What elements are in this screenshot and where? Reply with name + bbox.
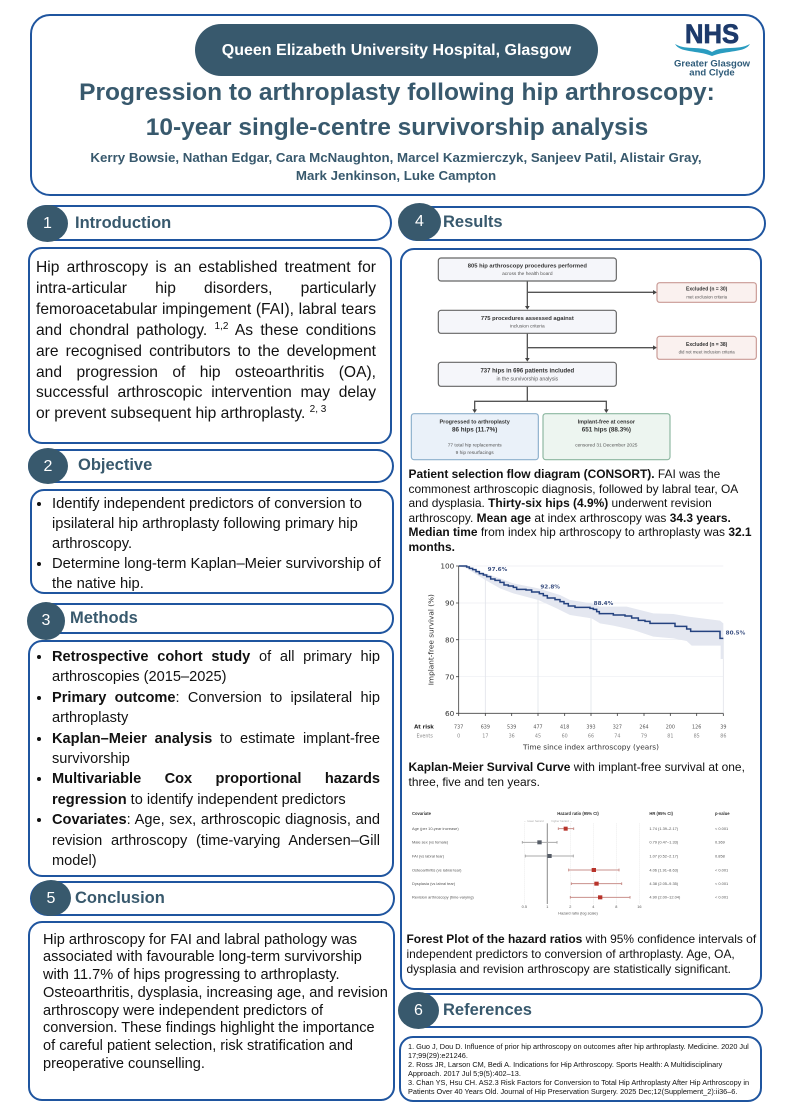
at risk table: 264 (639, 725, 649, 731)
row: male sex (412, 840, 725, 845)
at risk table: 74 (614, 734, 620, 740)
forest x axis (522, 905, 641, 916)
y axis labels: 80 (445, 635, 455, 644)
box: 805 procedures (438, 258, 616, 281)
panel: objective: Determine long-term Kaplan–Meier survivorship of the native hip. (52, 556, 381, 592)
column headers: Covariate (412, 811, 432, 816)
row: dysplasia: Dysplasia (vs labral tear) (412, 881, 456, 886)
forest x axis: Hazard ratio (log scale) (558, 912, 599, 916)
icon: NHS Greater Glasgow and Clyde logo (674, 19, 751, 78)
box: 775 procedures: inclusion criteria (510, 323, 545, 329)
section heading: Methods (27, 602, 394, 640)
at risk table: 60 (562, 734, 568, 740)
section heading: Results: 4 (415, 213, 424, 230)
box: excluded 38: Excluded (n = 38) (686, 342, 728, 348)
column headers: HR (95% CI) (649, 811, 674, 816)
box: progressed to arthroplasty: 9 hip resurfacings (456, 450, 494, 456)
section heading: Methods: 3 (42, 612, 50, 629)
Kaplan-Meier survival chart (414, 562, 746, 751)
at risk table: 393 (586, 725, 596, 731)
row: revision arthroscopy: Revision arthroscopy (time-varying) (412, 895, 474, 900)
forest x axis: 1 (546, 905, 548, 909)
section heading: Methods: Methods (70, 609, 138, 627)
forest plot: ← lower hazard (524, 819, 544, 823)
panel: introduction text: Hip arthroscopy is an established treatment for intra-articular hip disorders, particularly femoroacetabular impingement (FAI), labral tears and chondral pathology. 1,2 As these conditions are recognised contributors to the development and progression of hip osteoarthritis (OA), successful arthroscopic intervention may delay or prevent subsequent hip arthroplasty. 2, 3 (36, 259, 376, 422)
section heading: Results (398, 203, 766, 241)
panel: references: 1. Guo J, Dou D. Influence of prior hip arthroscopy on outcomes after hip arthroplasty. Medicine. 2020 Jul 17;99(29):e21246. (408, 1042, 749, 1060)
caption: patient selection flow diagram: Patient selection flow diagram (CONSORT). FAI was the commonest arthroscopic diagnosis, followed by labral tear, OA and dysplasia. Thirty-six hips (4.9%) underwent revision arthroscopy. Mean age at index arthroscopy was 34.3 years. Median time from index hip arthroscopy to arthroplasty was 32.1 months. (408, 467, 752, 554)
section heading: Results: Results (443, 213, 503, 231)
survival annotations (488, 567, 746, 636)
panel: methods: Retrospective cohort study of all primary hip arthroscopies (2015–2025) (52, 649, 380, 685)
row: FAI: FAI (vs labral tear) (412, 853, 445, 858)
box: excluded 30: Excluded (n = 30) (686, 287, 728, 293)
section heading: References: References (443, 1001, 532, 1019)
title: 10-year single-centre survivorship analysis (146, 114, 648, 141)
title: Progression to arthroplasty following hip arthroscopy: (79, 79, 715, 106)
section heading: Introduction: 1 (43, 215, 52, 232)
row: dysplasia: 4.38 (2.05–9.35) (649, 881, 679, 886)
at risk table: 539 (507, 725, 516, 731)
at risk table: 66 (588, 734, 594, 740)
forest x axis: 8 (615, 905, 617, 909)
panel: references (399, 1036, 762, 1102)
survival annotations: 88.4% (594, 601, 614, 607)
section heading: Objective: 2 (44, 458, 52, 475)
panel: methods: Primary outcome: Conversion to ipsilateral hip arthroplasty (52, 690, 380, 726)
row: age (412, 826, 728, 831)
survival annotations: 80.5% (726, 630, 746, 636)
at risk table: At risk (414, 725, 434, 731)
section heading: Objective (28, 448, 394, 484)
at risk table: 81 (667, 734, 673, 740)
y axis labels: 70 (445, 672, 455, 681)
at risk table: 39 (720, 725, 726, 731)
box: 737 hips (438, 362, 616, 386)
at risk table: 79 (641, 734, 647, 740)
panel: references: 2. Ross JR, Larson CM, Bedi A. Indications for Hip Arthroscopy. Sports Health: A Multidisciplinary Approach. 2017 Jul 5;9(5):402–13. (408, 1060, 722, 1078)
section heading: Conclusion: 5 (47, 890, 55, 907)
box: implant-free at censor: censored 31 December 2025 (575, 442, 638, 448)
y axis labels: 100 (440, 562, 455, 571)
at risk table: 200 (666, 725, 675, 731)
section heading: Introduction: Introduction (75, 214, 171, 232)
row: FAI: 0.858 (715, 853, 726, 858)
at risk table: 36 (509, 734, 515, 740)
caption: Kaplan-Meier survival curve: Kaplan-Meier Survival Curve with implant-free survival at one, three, five and ten years. (408, 760, 745, 789)
row: male sex: Male sex (vs female) (412, 840, 449, 845)
axes (456, 566, 723, 716)
at risk table: 477 (533, 725, 543, 731)
row: osteoarthritis: < 0.001 (715, 867, 728, 872)
row: dysplasia (412, 881, 728, 886)
forest x axis: 16 (637, 905, 641, 909)
box: progressed to arthroplasty (411, 414, 538, 460)
at risk table (414, 725, 726, 740)
box: 737 hips: in the survivorship analysis (497, 376, 559, 382)
at risk table: 0 (457, 734, 460, 740)
forest x axis: 0.5 (522, 905, 527, 909)
section heading: Introduction (27, 205, 392, 242)
icon: NHS Greater Glasgow and Clyde logo: Greater Glasgow (674, 58, 751, 70)
panel: methods: Kaplan–Meier analysis to estimate implant-free survivorship (52, 731, 380, 767)
row: revision arthroscopy: < 0.001 (715, 895, 728, 900)
panel: results (400, 248, 762, 990)
row: osteoarthritis: Osteoarthritis (vs labral tear) (412, 867, 462, 872)
survival curve (459, 566, 723, 638)
box: progressed to arthroplasty: 77 total hip replacements (448, 442, 502, 448)
box: implant-free at censor: 651 hips (88.3%) (582, 427, 631, 434)
panel: objective (30, 489, 394, 594)
survival annotations: 92.8% (540, 585, 560, 591)
icon: NHS Greater Glasgow and Clyde logo: and Clyde (689, 68, 735, 78)
box: progressed to arthroplasty: Progressed to arthroplasty (440, 420, 511, 426)
row: male sex: 0.369 (715, 840, 725, 845)
at risk table: 86 (720, 734, 726, 740)
at risk table: 85 (694, 734, 700, 740)
row: male sex: 0.79 (0.47–1.33) (649, 840, 679, 845)
panel: objective: Identify independent predictors of conversion to ipsilateral hip arthroplasty following primary hip arthroscopy. (52, 496, 362, 552)
at risk table: 17 (482, 734, 488, 740)
y axis title: Implant-free survival (%) (426, 594, 435, 685)
row: FAI: 1.07 (0.52–2.17) (649, 853, 679, 858)
row: revision arthroscopy (412, 895, 728, 900)
hospital banner (195, 24, 598, 76)
row: revision arthroscopy: 4.90 (2.00–12.04) (649, 895, 681, 900)
panel: conclusion: Hip arthroscopy for FAI and labral pathology was associated with favourable long-term survivorship with 11.7% of hips progressing to arthroplasty. Osteoarthritis, dysplasia, increasing age, and revision arthroscopy were independent predictors of conversion. These findings highlight the importance of careful patient selection, risk stratification and preoperative counselling. (43, 932, 388, 1072)
panel: methods: Covariates: Age, sex, arthroscopic diagnosis, and revision arthroscopy (time-varying Andersen–Gill model) (52, 812, 380, 869)
hospital banner: Queen Elizabeth University Hospital, Glasgow (222, 42, 571, 59)
forest plot: higher hazard → (552, 819, 573, 823)
title (79, 79, 715, 141)
row: osteoarthritis: 4.06 (1.91–8.63) (649, 867, 679, 872)
at risk table: 45 (535, 734, 541, 740)
panel: references: 3. Chan YS, Hsu CH. AS2.3 Risk Factors for Conversion to Total Hip Arthroplasty After Hip Arthroscopy in Patients Over 40 Years Old. Journal of Hip Preservation Surgery. 2025 Dec;12(Supplement_2):ii36–6. (408, 1078, 749, 1096)
header panel (30, 14, 765, 196)
row: age: < 0.001 (715, 826, 728, 831)
y axis labels: 90 (445, 599, 455, 608)
survival annotations: 97.6% (488, 567, 508, 573)
at risk table: 639 (481, 725, 490, 731)
box: 775 procedures (438, 310, 616, 333)
panel: methods: Multivariable Cox proportional hazards regression to identify independent predictors (52, 771, 380, 808)
y axis labels (440, 562, 455, 718)
row: age: 1.74 (1.39–2.17) (649, 826, 679, 831)
caption: forest plot: Forest Plot of the hazard ratios with 95% confidence intervals of independent predictors to conversion of arthroplasty. Age, OA, dysplasia and revision arthroscopy are statistically significant. (406, 932, 756, 976)
box: excluded 30: met exclusion criteria (686, 294, 728, 299)
column headers: Hazard ratio (95% CI) (557, 811, 599, 816)
box: 737 hips: 737 hips in 696 patients included (480, 369, 575, 375)
box: 805 procedures: across the health board (502, 271, 553, 277)
section heading: Conclusion (30, 880, 395, 916)
forest x axis: 2 (569, 905, 571, 909)
icon: NHS Greater Glasgow and Clyde logo: NHS (685, 19, 739, 49)
row: age: Age (per 10-year increase) (412, 826, 459, 831)
forest plot (412, 811, 730, 916)
row: FAI (412, 853, 726, 858)
forest x axis: 4 (592, 905, 595, 909)
box: 805 procedures: 805 hip arthroscopy procedures performed (468, 264, 587, 270)
at risk table: 737 (454, 725, 463, 731)
box: implant-free at censor (543, 414, 670, 460)
row: osteoarthritis (412, 867, 728, 872)
column headers: p-value (715, 811, 730, 816)
box: excluded 30 (657, 283, 756, 302)
at risk table: 418 (560, 725, 569, 731)
authors: Mark Jenkinson, Luke Campton (296, 168, 496, 183)
authors (90, 150, 702, 183)
box: excluded 38 (657, 336, 756, 359)
at risk table: 327 (613, 725, 622, 731)
section heading: Objective: Objective (78, 456, 152, 474)
section heading: References (398, 992, 763, 1029)
box: 775 procedures: 775 procedures assessed against (481, 316, 574, 322)
box: excluded 38: did not meet inclusion criteria (679, 350, 735, 355)
y axis labels: 60 (445, 709, 455, 718)
panel: methods (28, 640, 394, 877)
at risk table: 126 (692, 725, 701, 731)
authors: Kerry Bowsie, Nathan Edgar, Cara McNaughton, Marcel Kazmierczyk, Sanjeev Patil, Alistair Gray, (90, 150, 702, 165)
box: implant-free at censor: Implant-free at censor (578, 420, 636, 426)
section heading: References: 6 (414, 1002, 423, 1019)
box: progressed to arthroplasty: 86 hips (11.7%) (452, 427, 497, 434)
confidence band (459, 566, 723, 659)
section heading: Conclusion: Conclusion (75, 889, 165, 907)
row: dysplasia: < 0.001 (715, 881, 728, 886)
x axis title: Time since index arthroscopy (years) (522, 742, 659, 751)
column headers (412, 811, 730, 816)
flow diagram (410, 257, 757, 460)
at risk table: Events (416, 734, 433, 740)
